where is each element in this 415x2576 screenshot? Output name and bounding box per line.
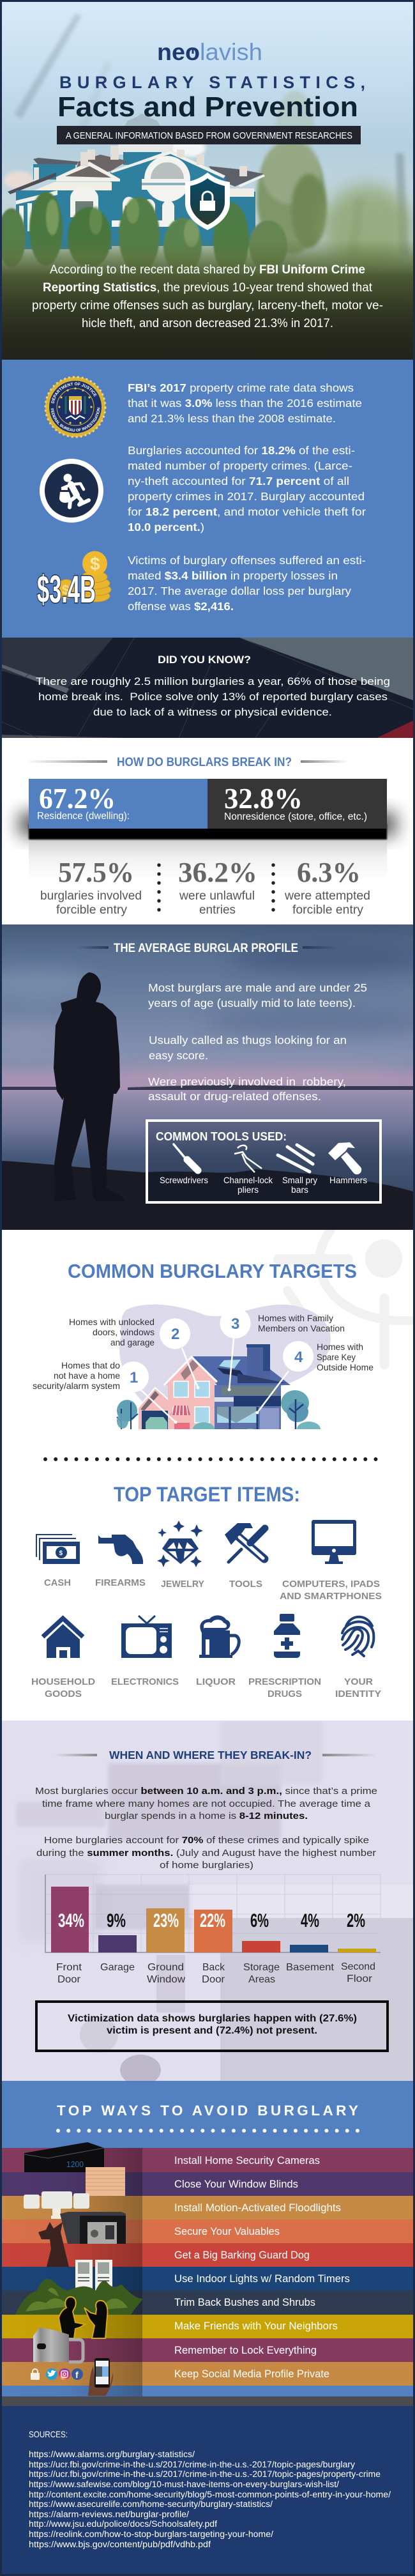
silhouette of man [54,972,125,1201]
horizon [2,1085,413,1090]
source links: https://ucr.fbi.gov/crime-in-the-u.s/2017/crime-in-the-u.s.-2017/topic-pages/property-crime [29,2469,381,2479]
stat: attempted forcible entry [285,862,370,916]
target labels: Members on Vacation [258,1323,345,1333]
panel: when and where they break in [2,1721,415,2085]
panel: hero header [0,2,413,360]
bar: nonresidence [207,779,387,829]
text: summer months: during the summer months. (July and August have the highest number [36,1848,376,1859]
text: FBI's 2017 property crime: FBI’s 2017 property crime rate data shows [128,381,354,394]
logo: neolavish: lavish [200,39,262,65]
heading [81,943,332,952]
item labels row 2: ELECTRONICS [111,1676,179,1687]
icon: instagram [59,2368,70,2380]
tool labels: Screwdrivers [160,1175,208,1185]
panel: FBI statistics [2,360,413,638]
source links: http://www.jsu.edu/police/docs/Schoolsafety.pdf [29,2519,217,2529]
item labels row 1: COMPUTERS, IPADS [282,1579,380,1590]
tool labels: bars [291,1184,308,1195]
item labels row 2: LIQUOR [196,1676,236,1687]
bar: garage 9%: 9% [107,1910,126,1931]
logo: neolavish: neo [157,39,200,65]
item labels row 1: FIREARMS [95,1577,146,1588]
heading: COMMON BURGLARY TARGETS [68,1260,357,1282]
band: valuables [2,2220,413,2243]
band: lock everything [2,2338,413,2362]
stat: unlawful entries: were unlawful [179,889,255,903]
source links: https://www.safewise.com/blog/10-must-have-items-on-every-burglars-wish-list/ [29,2480,339,2489]
divider band [2,2396,413,2406]
text: burglaries accounted for: for 18.2 percent , and motor vehicle theft for [128,505,366,518]
callout 3 [220,1308,250,1338]
source links: https://alarm-reviews.net/burglar-profile/ [29,2510,189,2519]
subtitle bar: A GENERAL INFORMATION BASED FROM GOVERNMENT RESEARCHES [66,130,352,141]
band: bushes and shrubs: Trim Back Bushes and Shrubs [174,2296,315,2308]
pointer lines [140,1338,289,1422]
chart category labels: Ground [147,1962,184,1973]
band: neighbors: Make Friends with Your Neighbors [174,2320,338,2332]
bar: back door 22% [194,1910,232,1952]
profile text: assault or drug-related offenses. [148,1090,321,1103]
text: burglaries accounted for: mated number of property crimes. (Larce- [128,459,352,472]
stat: forcible entry [41,862,141,916]
stat: unlawful entries: 36.2% [178,857,257,888]
bar: basement 4% [290,1910,328,1952]
foreground trees [0,192,287,277]
target labels: Homes that do [61,1360,120,1370]
text: victims of burglary: offense was $2,416. [128,600,234,613]
panel: targets and items [2,1230,415,1721]
heading: TOP WAYS TO AVOID BURGLARY [57,2103,358,2119]
bar: ground window 23% [146,1908,185,1952]
text: burglaries accounted for: Burglaries accounted for 18.2% of the esti- [128,444,355,457]
item labels row 2: PRESCRIPTION [248,1676,321,1687]
blurred foreground grass strands [14,14,409,256]
text: burglaries accounted for: property crimes in 2017. Burglary accounted [128,490,365,503]
heading: DID YOU KNOW? [158,654,251,666]
heading: THE AVERAGE BURGLAR PROFILE [114,942,298,955]
target labels: not have a home [54,1370,120,1381]
heading: top target items: TOP TARGET ITEMS: [114,1483,300,1506]
tool labels [160,1175,367,1195]
icon: running burglar [40,459,103,523]
intro text: According to the recent data shared by FBI Uniform Crime [50,263,365,277]
clouds and distant dome [4,114,206,189]
icon: beer mug [199,1615,239,1658]
stat: unlawful entries: entries [199,903,236,917]
panel: sources [2,2406,413,2574]
bar: nonresidence: 32.8% [224,782,303,815]
house illustration [117,1344,321,1429]
callout: victimization data: Victimization data shows burglaries happen with (27.6%) [68,2013,357,2024]
title: BURGLARY STATISTICS, [59,73,365,92]
callout 3: 3 [231,1315,239,1333]
icon: computer monitor [312,1520,356,1564]
band: indoor lights [2,2267,413,2290]
ground [2,1161,413,1230]
heading [54,1749,377,1761]
icon: FBI seal [45,376,106,438]
callout 2 [160,1319,190,1349]
panel: how do burglars break in [2,738,413,924]
icon: cash [36,1534,80,1564]
product photo: bush [15,2279,143,2315]
icon: FBI seal: FEDERAL BUREAU OF INVESTIGATION [51,408,100,432]
target labels: Homes with Family [258,1313,333,1323]
callout 1: 1 [130,1369,138,1386]
source links: http://content.excite.com/home-security/blog/5-most-common-points-of-entry-in-your-home/ [29,2490,391,2499]
band: guard dog [2,2243,413,2267]
bar chart: entry points [45,1874,381,1985]
chart category labels: Areas [248,1974,275,1985]
band: window blinds: Close Your Window Blinds [174,2178,298,2190]
chimneys [80,146,247,176]
chart category labels: Basement [286,1962,335,1973]
text: burglaries accounted for: ny-theft accounted for 71.7 percent of all [128,475,349,487]
bar: residence: Residence (dwelling): [37,811,130,822]
callout 2: 2 [171,1326,179,1343]
chart category labels: Garage [100,1962,135,1973]
text: summer months: of home burglaries) [160,1860,253,1871]
photo: hand with phone [88,2358,113,2396]
lavender blob [119,1305,331,1406]
text: burglaries accounted for [128,444,366,533]
icon: channel-lock pliers [234,1146,262,1172]
product photo: camera clock: 1200 [66,2159,84,2169]
target labels: Outside Home [317,1362,374,1372]
bar: back door 22%: 22% [200,1910,225,1931]
product photo: floodlight [24,2191,89,2219]
band: security cameras [2,2148,413,2172]
bar: storage areas 6%: 6% [250,1910,269,1931]
bar: nonresidence: Nonresidence (store, office, etc.) [224,811,367,822]
callout: victimization data: victim is present and (72.4%) not present. [107,2025,317,2036]
callout 1 [118,1361,149,1392]
heading: HOW DO BURGLARS BREAK IN? [117,756,292,769]
text: summer months: Home burglaries account for 70% of these crimes and typically spike [44,1835,369,1846]
target labels: doors, windows [93,1327,155,1337]
band: indoor lights: Use Indoor Lights w/ Random Timers [174,2273,350,2285]
heading: COMMON TOOLS USED: [156,1130,287,1143]
text: time of burglaries [35,1786,377,1821]
bar: front door 34% [51,1887,89,1952]
common tools box [147,1121,381,1202]
did you know text: due to lack of a witness or physical evidence. [93,706,332,718]
icon: gold coins with $3.4B: $ [62,583,69,597]
target labels: security/alarm system [33,1381,120,1391]
text: victims of burglary: 2017. The average dollar loss per burglary [128,585,351,597]
band: floodlights [2,2196,413,2220]
target labels [33,1313,374,1391]
band: security cameras: Install Home Security Cameras [174,2154,320,2166]
item labels row 2: DRUGS [268,1689,302,1699]
item labels row 2: IDENTITY [335,1689,381,1699]
item labels row 1: CASH [44,1577,71,1588]
intro text: property crime offenses such as burglary, larceny-theft, motor ve- [32,299,383,312]
text: victims of burglary: mated $3.4 billion in property losses in [128,569,338,582]
icon: FBI seal: DEPARTMENT OF JUSTICE [51,382,97,404]
profile text: years of age (usually mid to late teens). [148,997,356,1009]
chart category labels: Front [56,1962,82,1973]
source links: https://ucr.fbi.gov/crime-in-the-u.s/2017/crime-in-the-u.s.-2017/topic-pages/burglary [29,2460,355,2469]
title [59,76,364,117]
tool labels: Channel-lock [223,1175,273,1185]
band: social media [2,2362,413,2386]
icon: facebook: f [75,2370,79,2380]
text: victims of burglary: Victims of burglary offenses suffered an esti- [128,554,366,567]
callout 4 [283,1341,313,1372]
chart category labels: Back [202,1962,225,1973]
logo: neolavish [158,43,260,60]
birch tree [257,91,327,254]
product photo: blinds [86,2167,125,2196]
band: floodlights: Install Motion-Activated Floodlights [174,2202,341,2214]
target labels: and garage [110,1337,155,1347]
source links: https://www.bjs.gov/content/pub/pdf/vdhb.pdf [29,2540,211,2549]
product photo: safe [60,2212,126,2244]
chart category labels: Window [147,1974,185,1985]
bar: residence [29,779,207,829]
target labels: Spare Key [317,1352,356,1362]
source links: https://www.alarms.org/burglary-statistics/ [29,2450,195,2459]
band: guard dog: Get a Big Barking Guard Dog [174,2249,310,2261]
watermark burglar figure [278,1230,415,1365]
bar: basement 4%: 4% [301,1910,319,1931]
tip list bands [2,2148,413,2386]
target labels: Homes with unlocked [69,1317,155,1327]
sources heading: SOURCES: [29,2429,68,2439]
profile text: easy score. [149,1049,208,1062]
clouds [0,943,415,1078]
item labels row 1: JEWELRY [161,1579,204,1590]
bar: second floor 2%: 2% [347,1910,365,1931]
faded room photo background [16,1721,415,2085]
product photo: camera clock [24,2142,104,2172]
did you know text: home break ins. Police solve only 13% of reported burglary cases [38,691,388,703]
icon: gold coins with $3.4B: $ [90,554,100,574]
chart category labels [56,1961,375,1985]
icon: shield with padlock [185,172,230,230]
source links: https://reolink.com/how-to-stop-burglars-targeting-your-home/ [29,2529,273,2539]
icon: jewel [157,1521,203,1567]
icon: gold coins with $3.4B: $3.4B [37,568,96,611]
band: bushes and shrubs [2,2290,413,2315]
icon: firearm [98,1535,143,1564]
panel: average burglar profile [0,924,415,1230]
icon: medicine bottle [274,1614,300,1658]
chart category labels: Second [341,1961,375,1972]
target labels: Homes with [317,1342,363,1352]
item labels row 2: YOUR [344,1676,373,1687]
stat: attempted forcible entry: forcible entry [292,903,363,917]
title: Facts and Prevention [57,91,358,123]
shadow under bars [19,813,396,880]
tool labels: pliers [238,1184,259,1195]
stat: attempted forcible entry: 6.3% [297,857,361,888]
chart category labels: Door [57,1974,81,1985]
bar: front door 34%: 34% [58,1910,84,1931]
callout: victimization data [36,2002,388,2051]
subtitle bar [57,126,361,144]
text: FBI's 2017 property crime [128,381,362,425]
source links: https://www.asecurelife.com/home-security/burglary-statistics/ [29,2499,273,2509]
panel: did you know [2,638,413,738]
icon: screwdriver [174,1144,198,1170]
band: window blinds [2,2172,413,2196]
text: burglaries accounted for: 10.0 percent. ) [128,521,204,533]
icon: facebook [72,2368,83,2380]
tool labels: Small pry [282,1175,317,1185]
product photo: timers [75,2260,112,2290]
item labels row 1 [44,1577,382,1602]
product photo: padlock [33,2327,83,2362]
profile text [148,981,367,1103]
stat: unlawful entries [179,862,255,914]
text: time of burglaries: Most burglaries occur between 10 a.m. and 3 p.m., since that’s a prime [35,1786,377,1797]
icon: pry bars [278,1145,313,1172]
text: time of burglaries: time frame where many homes are not occupied. The average time a [42,1798,371,1809]
bar: ground window 23%: 23% [153,1910,179,1931]
intro text [32,263,383,330]
item labels row 2: HOUSEHOLD [31,1676,95,1687]
blue wooden house [8,144,265,249]
icon: cash: $ [59,1550,63,1557]
chart category labels: Door [202,1974,225,1985]
bar: second floor 2% [338,1910,376,1952]
icon: twitter [46,2368,57,2380]
bar: garage 9% [98,1910,137,1952]
item labels row 2: GOODS [45,1689,82,1699]
chart category labels: Storage [243,1962,280,1973]
stat: forcible entry: forcible entry [56,903,127,917]
silhouette: two neighbors talking [59,2297,107,2338]
item labels row 1: AND SMARTPHONES [280,1591,382,1602]
did you know text: There are roughly 2.5 million burglaries a year, 66% of those being [36,675,390,687]
text: FBI's 2017 property crime: that it was 3.0% less than the 2016 estimate [128,397,362,410]
band: neighbors [2,2315,413,2338]
profile text: Usually called as thugs looking for an [149,1034,347,1046]
profile text: Most burglars are male and are under 25 [148,981,367,994]
stat: forcible entry: 57.5% [58,857,134,888]
icon: tools [225,1523,265,1562]
stat: forcible entry: burglaries involved [40,889,142,903]
item labels row 2 [31,1676,381,1699]
text: time of burglaries: burglar spends in a home is 8-12 minutes. [105,1811,308,1821]
tool labels: Hammers [329,1175,367,1185]
icon: house [43,1618,83,1658]
chart category labels: Floor [347,1974,373,1984]
blurred green on right side [322,185,412,269]
item labels row 1: TOOLS [229,1579,262,1590]
icon: hammer [328,1142,361,1174]
bar: storage areas 6% [242,1910,280,1952]
band: valuables: Secure Your Valuables [174,2225,280,2237]
icon: gold coins with $3.4B [37,551,111,611]
bar: residence: 67.2% [39,782,116,815]
icon: television [121,1616,172,1658]
did you know text [36,675,390,718]
icon: white lock [31,2369,40,2380]
icon: fingerprint [342,1617,374,1656]
callout 4: 4 [294,1349,303,1366]
profile text: Were previously involved in robbery, [148,1075,346,1088]
band: social media: Keep Social Media Profile Private [174,2368,329,2380]
arched windows [19,187,188,231]
stat: attempted forcible entry: were attempted [284,889,370,903]
text: victims of burglary [128,554,366,613]
text: FBI's 2017 property crime: and 21.3% less than the 2008 estimate. [128,412,336,425]
product photo: guard dog [38,2222,69,2267]
text: summer months [36,1835,376,1871]
band: lock everything: Remember to Lock Everything [174,2344,317,2356]
panel: top ways to avoid burglary [2,2081,413,2396]
heading: WHEN AND WHERE THEY BREAK-IN? [109,1749,312,1761]
intro text: hicle theft, and arson decreased 21.3% in 2017. [82,317,333,330]
source links [29,2450,391,2549]
intro text: Reporting Statistics, the previous 10-year trend showed that [43,281,373,295]
